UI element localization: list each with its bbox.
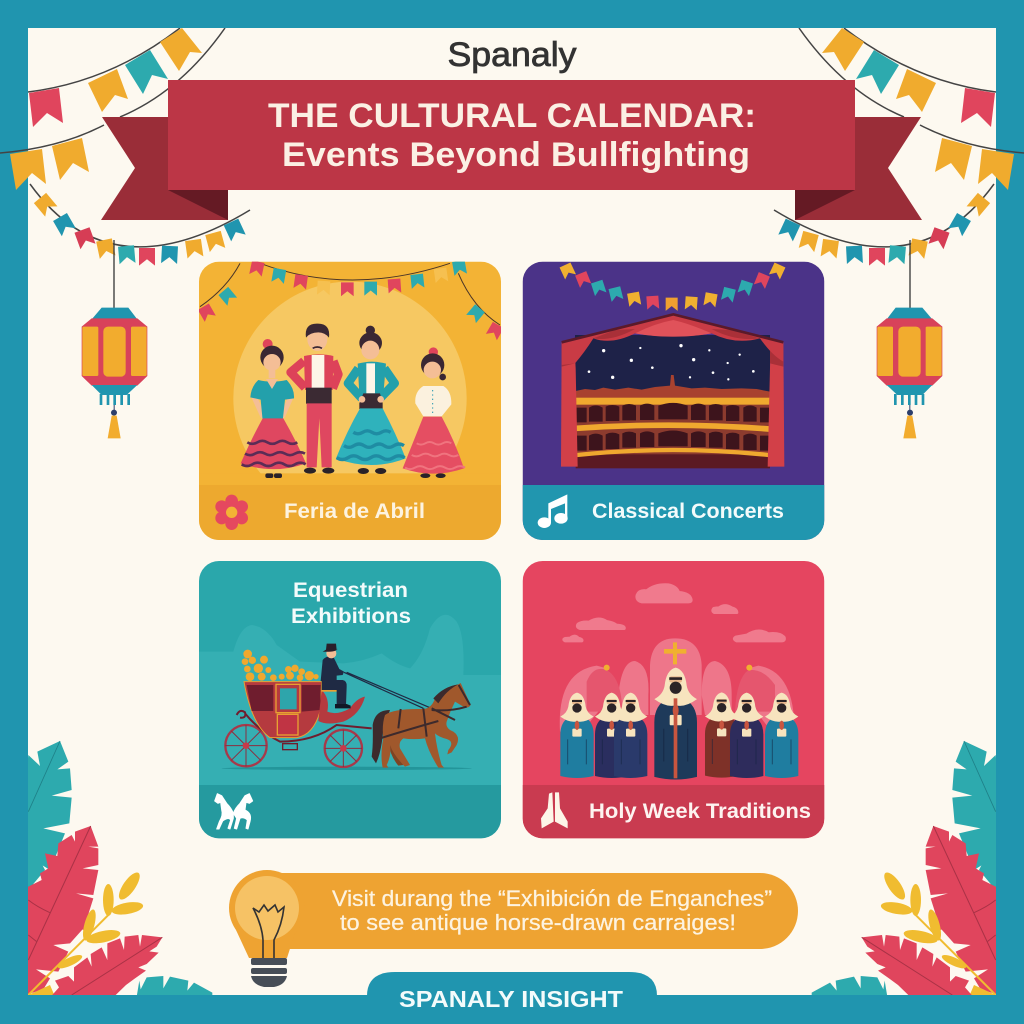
- icon: flower: [215, 495, 248, 530]
- theatre stage: [561, 314, 784, 468]
- man in red jacket: [291, 324, 338, 474]
- left hanging lantern: [82, 240, 147, 438]
- woman in red skirt: [241, 339, 306, 478]
- title ribbon banner: [101, 80, 922, 220]
- panel: Holy Week Traditions: [523, 561, 824, 838]
- clouds: [564, 585, 785, 641]
- right bunting garlands: [774, 28, 1024, 266]
- footer tab: SPANALY INSIGHT: [399, 986, 623, 1012]
- title text: Events Beyond Bullfighting: [282, 136, 750, 174]
- callout text: Visit durang the “Exhibición de Enganches”: [332, 886, 772, 911]
- small bunting: [560, 262, 785, 311]
- right corner tropical leaves: [812, 741, 1004, 997]
- label: Classical Concerts: Classical Concerts: [592, 500, 784, 523]
- carriage and driver: [225, 644, 430, 767]
- brand name: Spanaly: [448, 36, 576, 74]
- panel: Classical Concerts: [523, 262, 824, 540]
- icon: music note: [538, 494, 568, 528]
- panel: Equestrian Exhibitions: [199, 561, 501, 838]
- arches behind figures: [560, 638, 794, 732]
- title text: [268, 97, 756, 174]
- robed procession figures: [560, 668, 798, 779]
- left corner tropical leaves: [20, 741, 212, 997]
- callout text: [332, 886, 772, 935]
- woman in teal skirt: [336, 326, 406, 474]
- right hanging lantern: [877, 240, 942, 438]
- left bunting garlands: [0, 28, 250, 266]
- label: Feria de Abril: Feria de Abril: [284, 500, 425, 523]
- horse: [372, 683, 471, 768]
- icon: white horses: [215, 794, 253, 829]
- label: Equestrian Exhibitions: Equestrian: [293, 579, 408, 602]
- title text: THE CULTURAL CALENDAR:: [268, 97, 756, 135]
- woman in white blouse: [403, 347, 465, 478]
- icon: praying hands: [541, 792, 568, 828]
- callout text: to see antique horse-drawn carraiges!: [340, 910, 736, 935]
- label: Equestrian Exhibitions: [291, 579, 411, 628]
- icon: light bulb: [229, 870, 305, 987]
- label: Equestrian Exhibitions: Exhibitions: [291, 605, 411, 628]
- footer tab: [367, 972, 657, 1012]
- callout: insight tip: [229, 870, 798, 987]
- panel: Feria de Abril: [198, 260, 504, 540]
- star and cross ornaments: [604, 642, 752, 671]
- label: Holy Week Traditions: Holy Week Traditions: [589, 800, 811, 823]
